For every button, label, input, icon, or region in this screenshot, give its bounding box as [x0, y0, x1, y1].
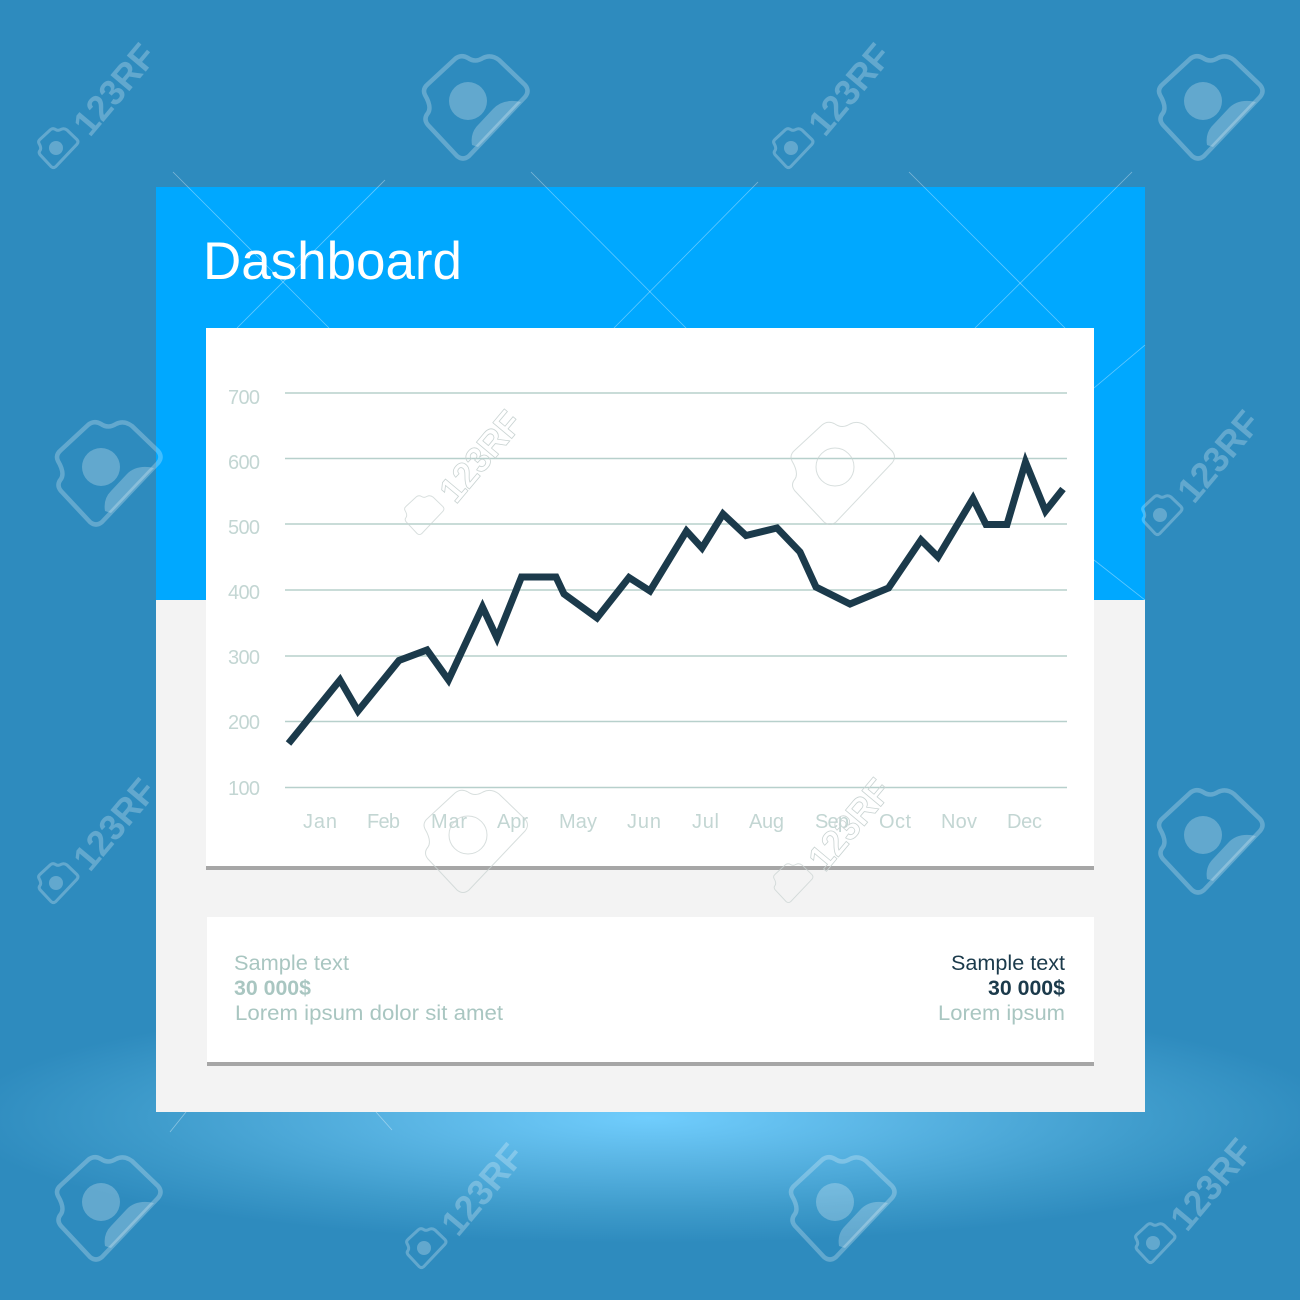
panel: dashboard [156, 187, 1145, 1112]
y axis labels: 400 [228, 582, 260, 604]
y axis labels: 100 [228, 778, 260, 800]
background glow [0, 990, 1300, 1250]
summary text right: 30 000$ [988, 977, 1065, 1000]
x axis labels: Sep [815, 811, 849, 833]
watermark: outlined logo lower centre: 123RF [800, 771, 899, 878]
x axis labels [303, 811, 1042, 833]
x axis labels: Dec [1007, 811, 1042, 833]
watermark: outlined egg lower centre [424, 790, 528, 892]
summary text left: Sample text [234, 952, 349, 975]
panel: chart card [206, 328, 1094, 870]
x axis labels: Apr [497, 811, 528, 833]
chart gridlines [285, 393, 1067, 788]
x axis labels: May [559, 811, 597, 833]
summary text left [234, 952, 503, 1025]
watermark: egg bottom middle [791, 1157, 894, 1260]
watermark: logo lower left [39, 771, 164, 903]
x axis labels: Jun [627, 811, 661, 833]
x axis labels: Oct [879, 811, 911, 833]
y axis labels: 600 [228, 452, 260, 474]
summary text right [938, 952, 1065, 1025]
watermark: outlined logo middle [405, 403, 530, 535]
watermark: egg top right [1159, 56, 1262, 158]
x axis labels: Jan [303, 811, 337, 833]
watermark: logo top centre [774, 36, 899, 168]
line chart [288, 462, 1063, 744]
watermark: logo bottom right [1136, 1131, 1261, 1263]
x axis labels: Jul [692, 811, 719, 833]
watermark: egg bottom left [57, 1157, 160, 1260]
summary text left: Lorem ipsum dolor sit amet [235, 1002, 503, 1025]
summary text right: Sample text [951, 952, 1065, 975]
x axis labels: Feb [367, 811, 400, 833]
watermark: logo bottom centre: 123RF [433, 1136, 532, 1243]
decorative hairlines [170, 172, 1145, 1132]
watermark: logo middle right: 123RF [1169, 403, 1268, 510]
watermark: egg lower right [1159, 790, 1262, 892]
watermark: egg middle left [57, 422, 160, 524]
y axis labels [228, 387, 260, 800]
y axis labels: 700 [228, 387, 260, 409]
panel: summary card [207, 917, 1094, 1066]
y axis labels: 500 [228, 517, 260, 539]
watermark: egg top centre [424, 56, 528, 158]
watermark: logo top centre: 123RF [800, 36, 899, 143]
title: Dashboard [203, 232, 462, 291]
watermark: logo top left: 123RF [65, 36, 164, 143]
x axis labels: Nov [941, 811, 977, 833]
y axis labels: 200 [228, 712, 260, 734]
watermark: outlined logo lower centre [774, 771, 899, 903]
panel header [156, 187, 1145, 600]
watermark: logo bottom centre [407, 1136, 532, 1268]
watermark: logo top left [39, 36, 164, 168]
x axis labels: Aug [749, 811, 784, 833]
watermark: logo lower left: 123RF [65, 771, 164, 878]
watermark: logo bottom right: 123RF [1162, 1131, 1261, 1238]
x axis labels: Mar [431, 811, 467, 833]
summary text left: 30 000$ [234, 977, 311, 1000]
watermark: logo middle right [1143, 403, 1268, 535]
watermark: outlined logo middle: 123RF [431, 403, 530, 510]
summary text right: Lorem ipsum [938, 1002, 1065, 1025]
watermark: outlined egg middle [791, 422, 894, 524]
y axis labels: 300 [228, 647, 260, 669]
